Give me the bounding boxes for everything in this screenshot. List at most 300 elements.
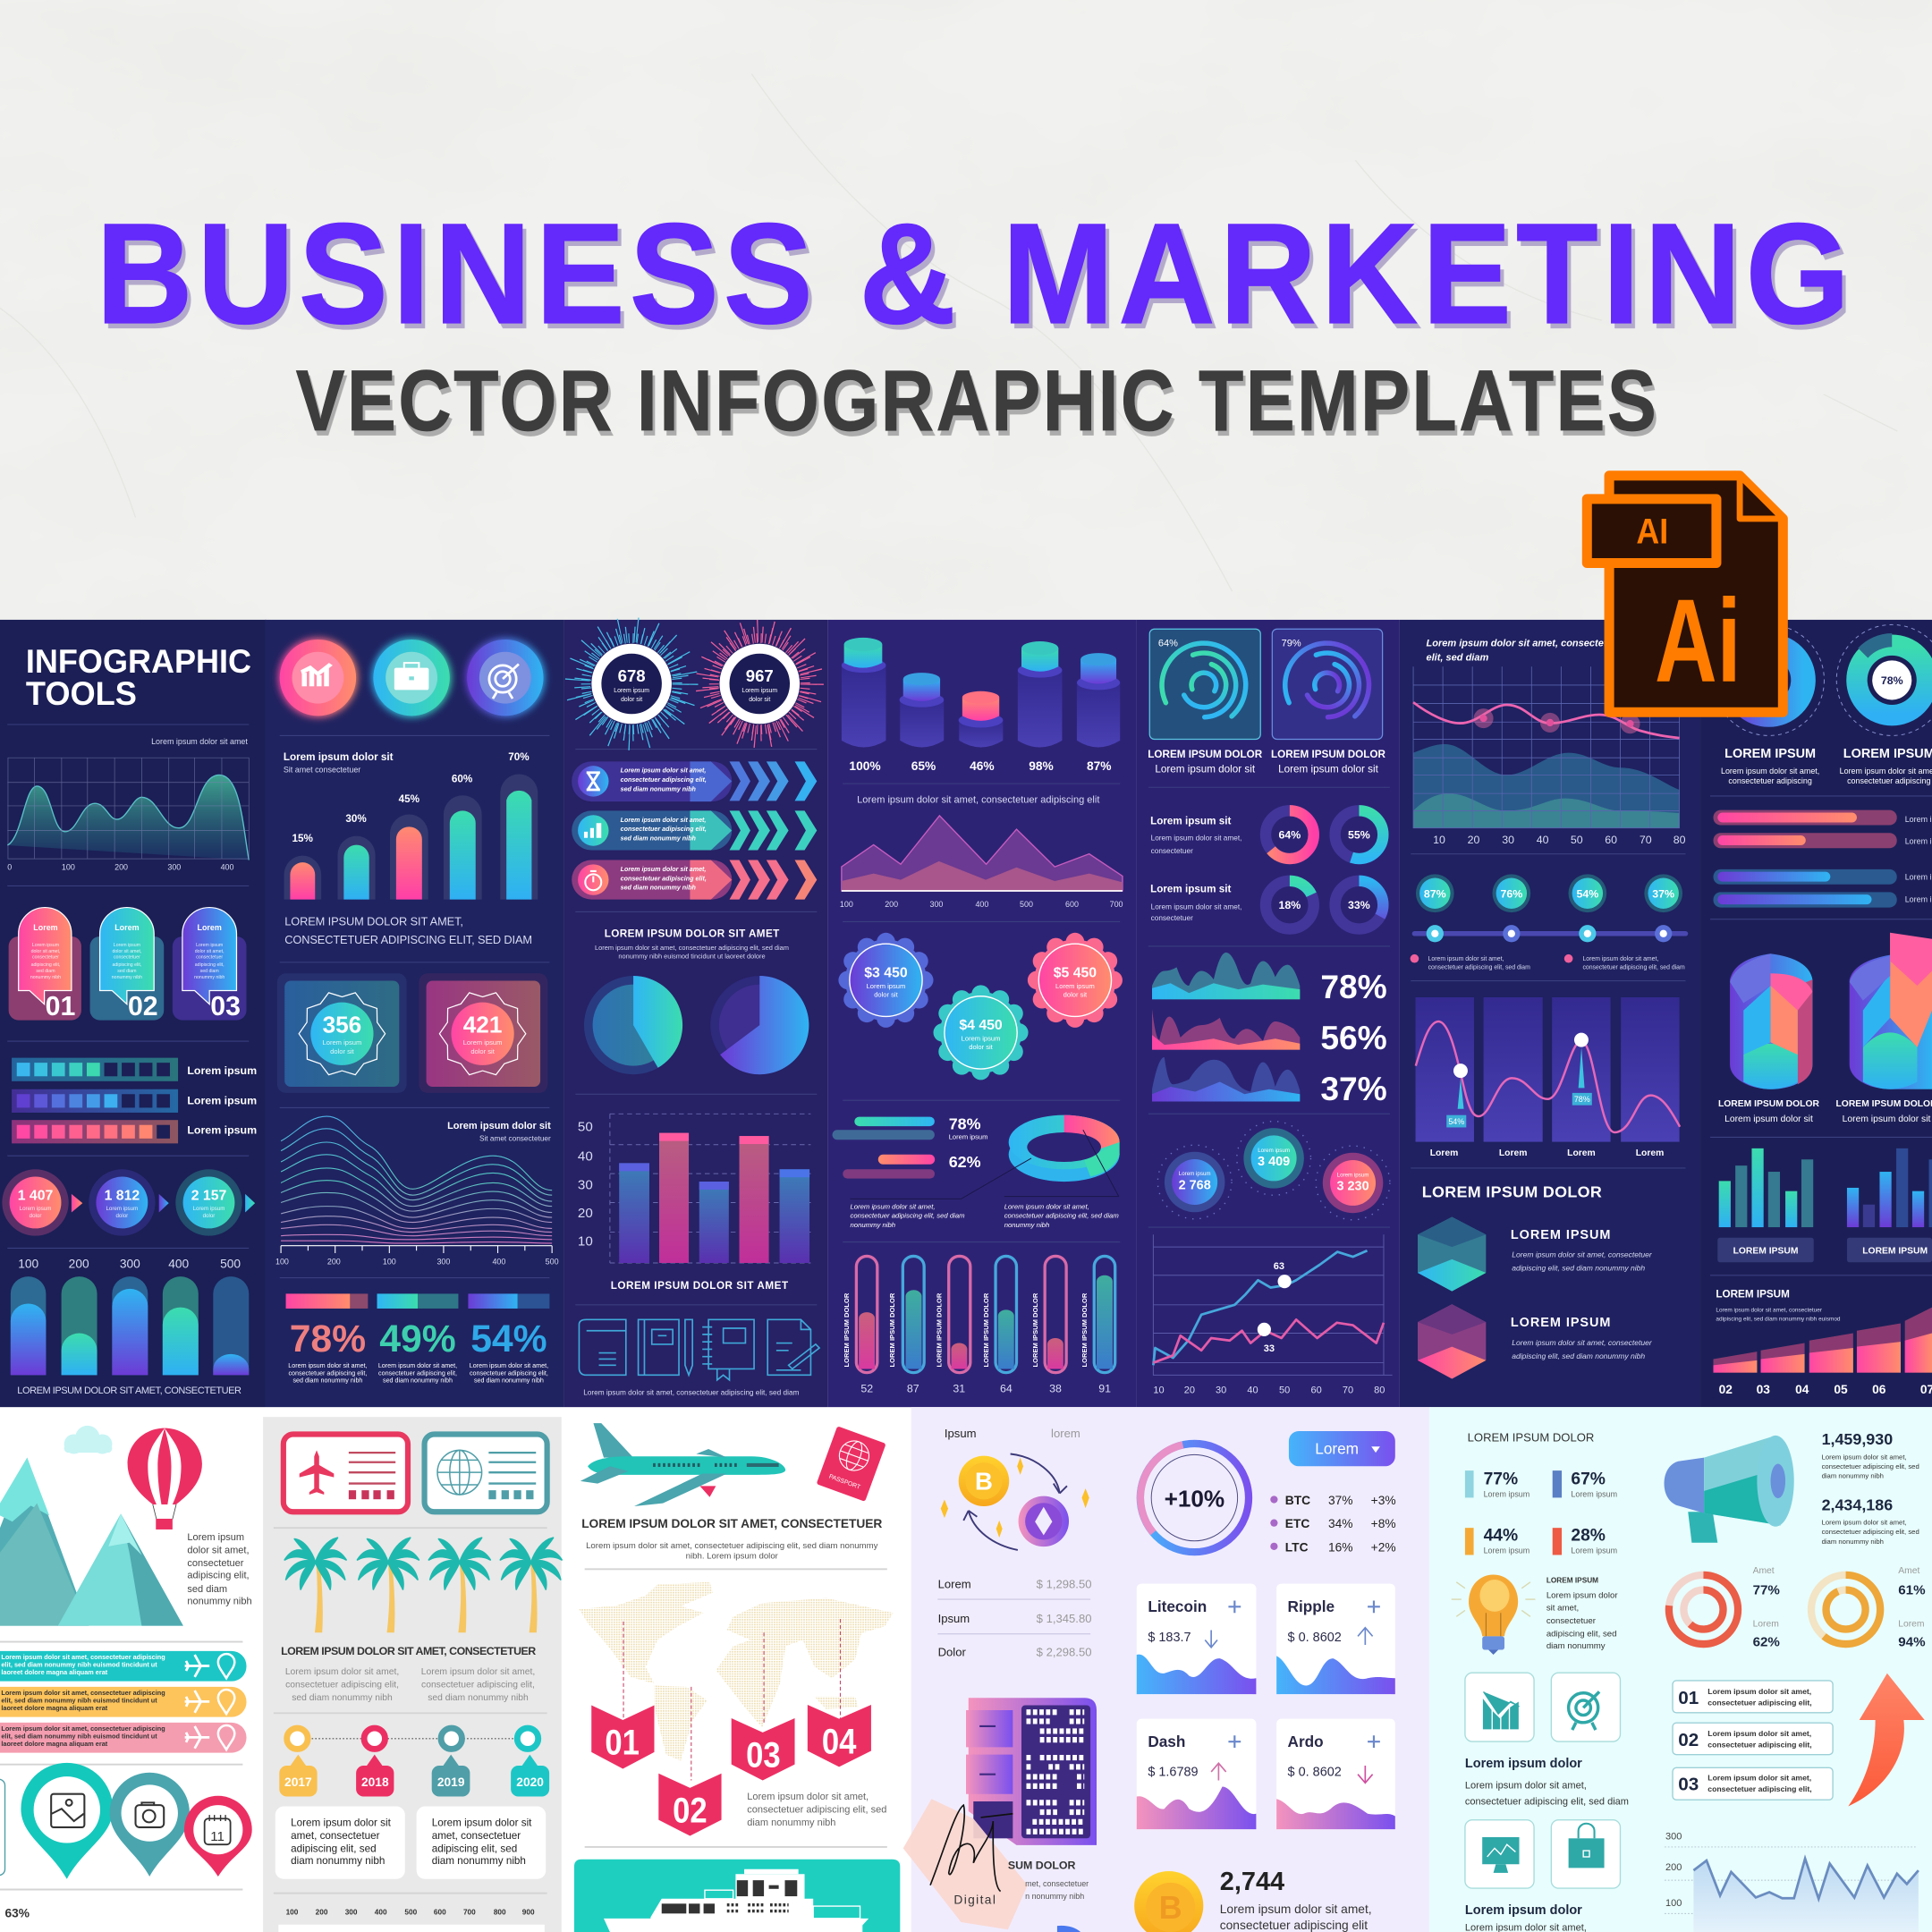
timeline: 2017 <box>284 1775 312 1789</box>
donut rings <box>1713 624 1932 785</box>
speech cards 01 02 03: sed diam <box>117 969 136 974</box>
big red arrow <box>1848 1674 1925 1806</box>
dashed map lines <box>623 1619 840 1781</box>
stat cards 356 and 421: Lorem ipsum <box>463 1038 502 1046</box>
dotted number circles: 3 230 <box>1336 1180 1369 1194</box>
rounded percent bars: CONSECTETUER ADIPISCING ELIT, SED DIAM <box>284 933 532 946</box>
icons: books and notes <box>579 1319 819 1380</box>
tube gauges: LOREM IPSUM DOLOR <box>1080 1292 1089 1367</box>
radial arc cards: Lorem ipsum dolor sit <box>1278 764 1379 775</box>
donut +10% <box>1140 1444 1249 1552</box>
text block: adipiscing elit, <box>187 1571 250 1581</box>
column curve chart: Lorem <box>1430 1148 1458 1158</box>
speech cards 01 02 03: dolor sit amet, <box>195 949 225 954</box>
chevron arrow rows: Lorem ipsum dolor sit amet, <box>621 866 706 873</box>
text block: sed diam <box>187 1584 227 1595</box>
heading and text <box>281 1645 536 1703</box>
ribbons: laoreet dolore magna aliquam erat <box>1 1740 108 1748</box>
small bar charts with buttons: LOREM IPSUM <box>1733 1247 1798 1257</box>
number circles: Lorem ipsum <box>106 1206 138 1212</box>
percent stats <box>1465 1430 1617 1555</box>
bulb text <box>1546 1576 1618 1651</box>
cloud <box>64 1426 112 1454</box>
small bars and 3d ring: 78% <box>949 1115 981 1133</box>
chevron arrow rows: consectetuer adipiscing elit, <box>621 875 707 882</box>
price list: $ 1,345.80 <box>1037 1612 1092 1625</box>
percent timeline: 76% <box>1500 888 1522 901</box>
bar chart: 50 <box>578 1120 593 1135</box>
white text cards: amet, consectetuer <box>432 1830 521 1842</box>
tube gauges: 52 <box>860 1383 873 1395</box>
tube gauges: 87 <box>907 1383 919 1395</box>
axis labels <box>286 1909 535 1917</box>
concentric rings: 77% <box>1753 1583 1780 1598</box>
heading and intro: LOREM IPSUM DOLOR SIT AMET, CONSECTETUER <box>581 1517 882 1530</box>
area chart <box>7 737 249 872</box>
white text cards: diam nonummy nibh <box>291 1855 385 1867</box>
layered grid chart: 20 <box>1468 834 1480 846</box>
hexagon list: adipiscing elit, sed diam nonummy nibh <box>1512 1352 1645 1360</box>
icon: briefcase <box>1569 1824 1605 1868</box>
percent timeline: 54% <box>1576 888 1598 901</box>
axis labels: 100 <box>286 1909 299 1917</box>
speech cards 01 02 03: Lorem <box>114 923 140 932</box>
speech cards 01 02 03: dolor sit amet, <box>31 949 60 954</box>
axis labels: 400 <box>375 1909 387 1917</box>
map text: diam nonummy nibh <box>747 1818 835 1828</box>
reach numbers: diam nonummy nibh <box>1822 1538 1884 1546</box>
pie charts: nonummy nibh euismod tincidunt ut laoreet dolore <box>618 953 766 961</box>
layered grid chart: 70 <box>1640 834 1652 846</box>
speech cards 01 02 03: Lorem <box>198 923 222 932</box>
layered grid chart: 80 <box>1674 834 1686 846</box>
bottom coin stat: Lorem ipsum dolor sit amet, <box>1220 1902 1372 1916</box>
bottom coin stat: 2,744 <box>1220 1868 1284 1896</box>
small bars and 3d ring: Lorem ipsum dolor sit amet, <box>1004 1202 1089 1210</box>
stepped area chart: Lorem ipsum dolor sit amet, consectetuer <box>1716 1307 1823 1313</box>
tube gauges: 38 <box>1049 1383 1062 1395</box>
3d segmented cylinders: LOREM IPSUM DOLOR <box>1718 1099 1820 1109</box>
icon: adobe illustrator file <box>1587 476 1783 712</box>
speech cards 01 02 03: sed diam <box>200 969 219 974</box>
area chart: 200 <box>114 863 128 872</box>
concentric rings: Lorem <box>1753 1619 1779 1629</box>
stat cards 356 and 421 <box>277 973 547 1093</box>
icon: stopwatch <box>585 871 601 890</box>
ribbons <box>0 1651 247 1753</box>
donut percentages: 64% <box>1278 828 1301 841</box>
reach numbers: Lorem ipsum dolor sit amet, <box>1822 1453 1907 1461</box>
line chart: 30 <box>1216 1385 1226 1395</box>
ray circles 678 and 967: 967 <box>746 666 774 685</box>
heading and text: LOREM IPSUM DOLOR SIT AMET, CONSECTETUER <box>281 1645 536 1657</box>
donut percentages: Lorem ipsum sit <box>1150 816 1231 827</box>
white text cards: Lorem ipsum dolor sit <box>291 1818 392 1829</box>
scalloped price badges <box>838 933 1123 1080</box>
scalloped price badges: dolor sit <box>1063 990 1088 998</box>
bulb text: Lorem ipsum dolor <box>1546 1590 1618 1600</box>
mountain area chart: 200 <box>885 900 898 909</box>
text block: consectetuer adipiscing elit, sed diam <box>1465 1797 1629 1808</box>
percent stats: Lorem ipsum <box>1484 1546 1530 1555</box>
rounded level bars <box>11 1258 249 1396</box>
cylinder bars: 87% <box>1087 759 1112 773</box>
icon cards row one <box>1465 1673 1620 1741</box>
mountain area chart <box>840 794 1123 909</box>
icon: hot air balloon <box>128 1428 202 1530</box>
mountain area chart: Lorem ipsum dolor sit amet, consectetuer adipiscing elit <box>857 794 1099 805</box>
donut rings: consectetuer adipiscing <box>1847 776 1931 785</box>
heading: infographic tools: INFOGRAPHIC <box>26 642 251 680</box>
scalloped price badges: $3 450 <box>864 965 908 980</box>
icon: monitor <box>1482 1837 1520 1873</box>
concentric rings: 61% <box>1898 1583 1926 1598</box>
wave line chart: 500 <box>546 1257 559 1266</box>
scalloped price badges: Lorem ipsum <box>867 982 905 990</box>
numbered boxes: 02 <box>1678 1730 1699 1750</box>
bar chart: 10 <box>578 1234 593 1250</box>
icon: megaphone <box>1665 1436 1794 1543</box>
price list: Dolor <box>938 1645 966 1658</box>
axis labels: 300 <box>345 1909 358 1917</box>
stat cards 356 and 421: Lorem ipsum <box>323 1038 361 1046</box>
timeline <box>279 1728 549 1796</box>
text block <box>187 1532 252 1607</box>
text block: dolor sit amet, <box>187 1545 250 1555</box>
radial arc cards: LOREM IPSUM DOLOR <box>1148 749 1263 760</box>
percent stats: LOREM IPSUM DOLOR <box>1468 1430 1594 1444</box>
bottom coin stat <box>1057 1868 1372 1932</box>
concentric rings <box>1669 1566 1926 1649</box>
3d segmented cylinders: Lorem ipsum dolor sit <box>1724 1114 1813 1124</box>
white text cards <box>275 1806 546 1879</box>
title: BUSINESS & MARKETING <box>96 193 1854 353</box>
panel: donuts and 3d charts column <box>1710 624 1932 1396</box>
coin table: +8% <box>1371 1517 1396 1530</box>
chevron arrow rows: Lorem ipsum dolor sit amet, <box>621 767 706 775</box>
heading and intro <box>581 1517 882 1561</box>
coin table: 16% <box>1328 1540 1353 1554</box>
heading and text: sed diam nonummy nibh <box>292 1693 393 1703</box>
line chart: 60 <box>1311 1385 1322 1395</box>
tube gauges <box>843 1256 1115 1395</box>
coin cards: $ 0. 8602 <box>1288 1631 1342 1645</box>
pie charts: Lorem ipsum dolor sit amet, consectetuer adipiscing elit, sed diam <box>595 944 789 952</box>
percent timeline: 37% <box>1652 888 1674 901</box>
stepped area chart: adipiscing elit, sed diam nonummy nibh euismod <box>1716 1317 1841 1323</box>
tube gauges: LOREM IPSUM DOLOR <box>843 1292 851 1367</box>
wave line chart: Lorem ipsum dolor sit <box>447 1121 551 1131</box>
rounded percent bars: 70% <box>508 751 530 763</box>
hexagon list: LOREM IPSUM <box>1511 1316 1610 1330</box>
white text cards: amet, consectetuer <box>291 1830 380 1842</box>
layered grid chart: 50 <box>1571 834 1583 846</box>
chevron arrow rows: sed diam nonummy nibh <box>621 885 697 892</box>
coin table: +2% <box>1371 1540 1396 1554</box>
ribbons: laoreet dolore magna aliquam erat <box>1 1668 108 1676</box>
dotted number circles: 3 409 <box>1258 1155 1290 1169</box>
horizontal progress bars <box>1713 810 1932 908</box>
numbered boxes: Lorem ipsum dolor sit amet, <box>1707 1687 1811 1696</box>
3d segmented cylinders: Lorem ipsum dolor sit <box>1843 1114 1931 1124</box>
world map <box>579 1582 894 1761</box>
layered grid chart: 60 <box>1605 834 1617 846</box>
mountain area chart: 600 <box>1065 900 1079 909</box>
stat cards 356 and 421: 421 <box>463 1011 502 1038</box>
wave line chart: 300 <box>436 1257 450 1266</box>
line chart: 20 <box>1184 1385 1195 1395</box>
text block <box>1465 1757 1629 1808</box>
rounded percent bars: Lorem ipsum dolor sit <box>284 751 394 763</box>
reach numbers: consectetuer adipiscing elit, sed <box>1822 1528 1919 1536</box>
layered grid chart: 10 <box>1433 834 1445 846</box>
watermark: brush signature: SUM DOLOR <box>1008 1860 1076 1872</box>
sparkline areas: 56% <box>1320 1019 1387 1056</box>
small bar charts with buttons <box>1717 1148 1932 1262</box>
concentric rings: 94% <box>1898 1634 1926 1649</box>
price list <box>937 1578 1092 1658</box>
concentric rings: Amet <box>1898 1566 1919 1576</box>
map markers 01 02 03 04 <box>591 1705 871 1836</box>
donut percentages: 33% <box>1348 899 1370 911</box>
bulb text: consectetuer <box>1546 1616 1597 1626</box>
percent stats: Lorem ipsum <box>1571 1546 1617 1555</box>
line area chart: 300 <box>1665 1832 1682 1843</box>
small bars and 3d ring: nonummy nibh <box>1004 1221 1049 1229</box>
building illustration <box>966 1698 1097 1845</box>
text block: Lorem ipsum <box>187 1532 244 1543</box>
text block: consectetuer <box>187 1558 244 1569</box>
crypto exchange icons: B <box>975 1467 993 1495</box>
rounded level bars: 300 <box>120 1257 140 1270</box>
ribbons: elit, sed diam nonummy nibh euismod tincidunt ut <box>1 1697 157 1705</box>
bar chart: LOREM IPSUM DOLOR SIT AMET <box>611 1280 789 1292</box>
column curve chart: 54% <box>1448 1117 1464 1126</box>
speech cards 01 02 03 <box>9 908 247 1021</box>
ribbons: Lorem ipsum dolor sit amet, consectetuer adipiscing <box>1 1689 165 1697</box>
wave line chart: 100 <box>275 1257 289 1266</box>
icon: plane <box>300 1450 334 1495</box>
chevron arrow rows: sed diam nonummy nibh <box>621 785 697 792</box>
radial arc cards <box>1148 629 1386 775</box>
speech cards 01 02 03: nonummy nibh <box>112 975 142 980</box>
stat cards 356 and 421: 356 <box>323 1011 361 1038</box>
crypto exchange icons: Ipsum <box>945 1427 977 1440</box>
number circles <box>2 1169 255 1236</box>
big percentages: 49% <box>379 1318 456 1360</box>
panel: grid chart and timeline column <box>1411 639 1686 1378</box>
hexagon list: Lorem ipsum dolor sit amet, consectetuer <box>1512 1250 1653 1259</box>
speech cards 01 02 03: nonummy nibh <box>30 975 61 980</box>
pie charts <box>584 928 809 1074</box>
dropdown button <box>1289 1431 1395 1466</box>
numbered boxes <box>1673 1681 1833 1800</box>
icon: growth bars <box>1484 1691 1520 1729</box>
speech cards 01 02 03: dolor sit amet, <box>112 949 141 954</box>
segmented progress bars: Lorem ipsum <box>187 1064 257 1077</box>
coin table: 34% <box>1328 1517 1353 1530</box>
coin cards: Dash <box>1148 1733 1185 1750</box>
chevron arrow rows <box>572 761 817 900</box>
line area chart: 200 <box>1665 1862 1682 1873</box>
heading and text: Lorem ipsum dolor sit amet, <box>285 1667 399 1677</box>
bulb text: sit amet, <box>1546 1603 1579 1613</box>
rounded level bars: LOREM IPSUM DOLOR SIT AMET, CONSECTETUER <box>17 1385 242 1396</box>
numbered boxes: consectetuer adipiscing elit, <box>1707 1699 1812 1707</box>
heading: infographic tools <box>26 642 251 712</box>
icon: picture <box>51 1794 84 1827</box>
heading text: elit, sed diam <box>1427 652 1489 663</box>
line chart: 80 <box>1374 1385 1385 1395</box>
icon: target <box>489 664 519 699</box>
percent stats: Lorem ipsum <box>1484 1489 1530 1498</box>
line chart: 50 <box>1279 1385 1290 1395</box>
segmented progress bars: Lorem ipsum <box>187 1123 257 1136</box>
number circles: 2 157 <box>191 1189 226 1204</box>
dotted number circles: Lorem ipsum <box>1258 1148 1290 1154</box>
heading: infographic tools: TOOLS <box>26 674 137 712</box>
donut +10%: +10% <box>1165 1486 1224 1513</box>
hexagon list: LOREM IPSUM DOLOR <box>1422 1182 1602 1200</box>
coin table: 37% <box>1328 1494 1353 1507</box>
donut percentages <box>1150 810 1383 929</box>
mountain area chart: 400 <box>975 900 988 909</box>
heading and text: sed diam nonummy nibh <box>428 1693 529 1703</box>
price list: $ 1,298.50 <box>1037 1578 1092 1591</box>
percent stats: Lorem ipsum <box>1571 1489 1617 1498</box>
speech cards 01 02 03: adipiscing elit, <box>195 962 225 968</box>
map markers 01 02 03 04: 02 <box>673 1791 708 1830</box>
heading and intro: Lorem ipsum dolor sit amet, consectetuer adipiscing elit, sed diam nonummy <box>586 1541 878 1551</box>
cylinder bars: 100% <box>849 759 881 773</box>
speech cards 01 02 03: adipiscing elit, <box>112 962 141 968</box>
rounded level bars: 100 <box>18 1257 39 1270</box>
icon: passport: PASSPORT <box>828 1474 861 1491</box>
mountain area chart: 700 <box>1110 900 1123 909</box>
cylinder bars: 98% <box>1029 759 1054 773</box>
concentric rings: Lorem <box>1898 1619 1925 1629</box>
axis labels: 200 <box>316 1909 328 1917</box>
tube gauges: LOREM IPSUM DOLOR <box>982 1292 990 1367</box>
map markers 01 02 03 04: 03 <box>746 1735 781 1775</box>
dotted number circles: Lorem ipsum <box>1337 1173 1368 1179</box>
rounded percent bars: 60% <box>452 774 473 785</box>
panel: cylinders and badges column <box>833 638 1123 1395</box>
panel: glowing icons and bars column <box>275 639 559 1385</box>
percent stats: 28% <box>1571 1526 1606 1545</box>
area chart: Lorem ipsum dolor sit amet <box>151 737 248 746</box>
speech cards 01 02 03: nonummy nibh <box>194 975 225 980</box>
axis labels: 700 <box>463 1909 476 1917</box>
small bars and 3d ring: Lorem ipsum dolor sit amet, <box>851 1202 936 1210</box>
radial arc cards: LOREM IPSUM DOLOR <box>1271 749 1386 760</box>
column curve chart: Lorem <box>1567 1148 1596 1158</box>
cylinder bars <box>842 638 1120 773</box>
donut percentages: 55% <box>1348 828 1370 841</box>
line chart <box>1153 1234 1393 1395</box>
percent timeline: 87% <box>1424 888 1446 901</box>
donut percentages: consectetuer <box>1151 914 1193 922</box>
hexagon list: LOREM IPSUM <box>1511 1228 1610 1242</box>
dotted number circles <box>1157 1122 1390 1220</box>
ribbons: elit, sed diam nonummy nibh euismod tincidunt ut <box>1 1732 157 1740</box>
speech cards 01 02 03: Lorem ipsum <box>32 943 59 948</box>
watermark: brush signature: n nonummy nibh <box>1025 1892 1084 1901</box>
price list: Lorem <box>938 1578 971 1591</box>
bar chart: 40 <box>578 1149 593 1165</box>
coin table <box>1270 1494 1396 1554</box>
reach numbers: Lorem ipsum dolor sit amet, <box>1822 1519 1907 1527</box>
stepped area chart: 02 <box>1719 1383 1733 1396</box>
watermark: brush signature: met, consectetuer <box>1025 1879 1089 1888</box>
bulb text: diam nonummy <box>1546 1641 1606 1651</box>
sparkline areas <box>1152 953 1387 1107</box>
icon: globe <box>437 1450 482 1495</box>
donut percentages: consectetuer <box>1151 847 1193 855</box>
speech cards 01 02 03: consectetuer <box>32 955 59 961</box>
segmented progress bars <box>12 1058 257 1143</box>
numbered boxes: 01 <box>1678 1688 1699 1708</box>
small bars and 3d ring: Lorem ipsum <box>949 1133 987 1141</box>
axis labels: 500 <box>404 1909 418 1917</box>
percent timeline: consectetuer adipiscing elit, sed diam <box>1582 964 1685 970</box>
timeline: 2018 <box>361 1775 389 1789</box>
wave line chart: 200 <box>327 1257 341 1266</box>
line area chart: 100 <box>1665 1898 1682 1909</box>
stepped area chart: 05 <box>1834 1383 1848 1396</box>
mountain area chart: 300 <box>929 900 943 909</box>
area chart: 300 <box>167 863 181 872</box>
reach numbers: 1,459,930 <box>1822 1430 1893 1448</box>
chevron arrow rows: consectetuer adipiscing elit, <box>621 826 707 833</box>
crypto exchange icons <box>941 1427 1089 1550</box>
panel: travel mountains <box>0 1426 252 1919</box>
percent timeline: Lorem ipsum dolor sit amet, <box>1428 956 1504 962</box>
panel: radial cards and sparklines column <box>1148 629 1393 1395</box>
area chart: 400 <box>221 863 234 872</box>
icon: adobe illustrator file: AI <box>1636 512 1668 551</box>
speech cards 01 02 03: sed diam <box>36 969 55 974</box>
heading and text: consectetuer adipiscing elit, <box>421 1680 535 1690</box>
donut rings: LOREM IPSUM <box>1724 747 1816 761</box>
speech cards 01 02 03: 01 <box>46 992 75 1021</box>
column curve chart: 78% <box>1574 1095 1590 1104</box>
numbered boxes: consectetuer adipiscing elit, <box>1707 1784 1812 1793</box>
coin cards: $ 0. 8602 <box>1288 1766 1342 1780</box>
big percentages: 78% <box>290 1318 366 1360</box>
watermark: brush signature <box>903 1799 1089 1929</box>
column curve chart <box>1416 997 1680 1158</box>
icon: adobe illustrator file: Ai <box>1655 575 1741 708</box>
percent stats: 44% <box>1484 1526 1518 1545</box>
coin table: LTC <box>1285 1540 1309 1554</box>
bottom coin stat: B <box>1159 1890 1182 1926</box>
numbered boxes: Lorem ipsum dolor sit amet, <box>1707 1774 1811 1783</box>
chevron arrow rows: Lorem ipsum dolor sit amet, <box>621 817 706 824</box>
reach numbers: consectetuer adipiscing elit, sed <box>1822 1462 1919 1470</box>
donut percentages: 18% <box>1278 899 1301 911</box>
scalloped price badges: Lorem ipsum <box>962 1034 1000 1042</box>
icon: calendar <box>205 1815 231 1844</box>
tube gauges: 91 <box>1098 1383 1111 1395</box>
speech cards 01 02 03: Lorem ipsum <box>114 943 140 948</box>
numbered boxes: Lorem ipsum dolor sit amet, <box>1707 1729 1811 1738</box>
stepped area chart: 04 <box>1795 1383 1809 1396</box>
donut rings: LOREM IPSUM <box>1843 747 1932 761</box>
line chart: 70 <box>1343 1385 1353 1395</box>
segmented progress bars: Lorem ipsum <box>187 1094 257 1106</box>
stat cards 356 and 421: dolor sit <box>330 1047 355 1055</box>
